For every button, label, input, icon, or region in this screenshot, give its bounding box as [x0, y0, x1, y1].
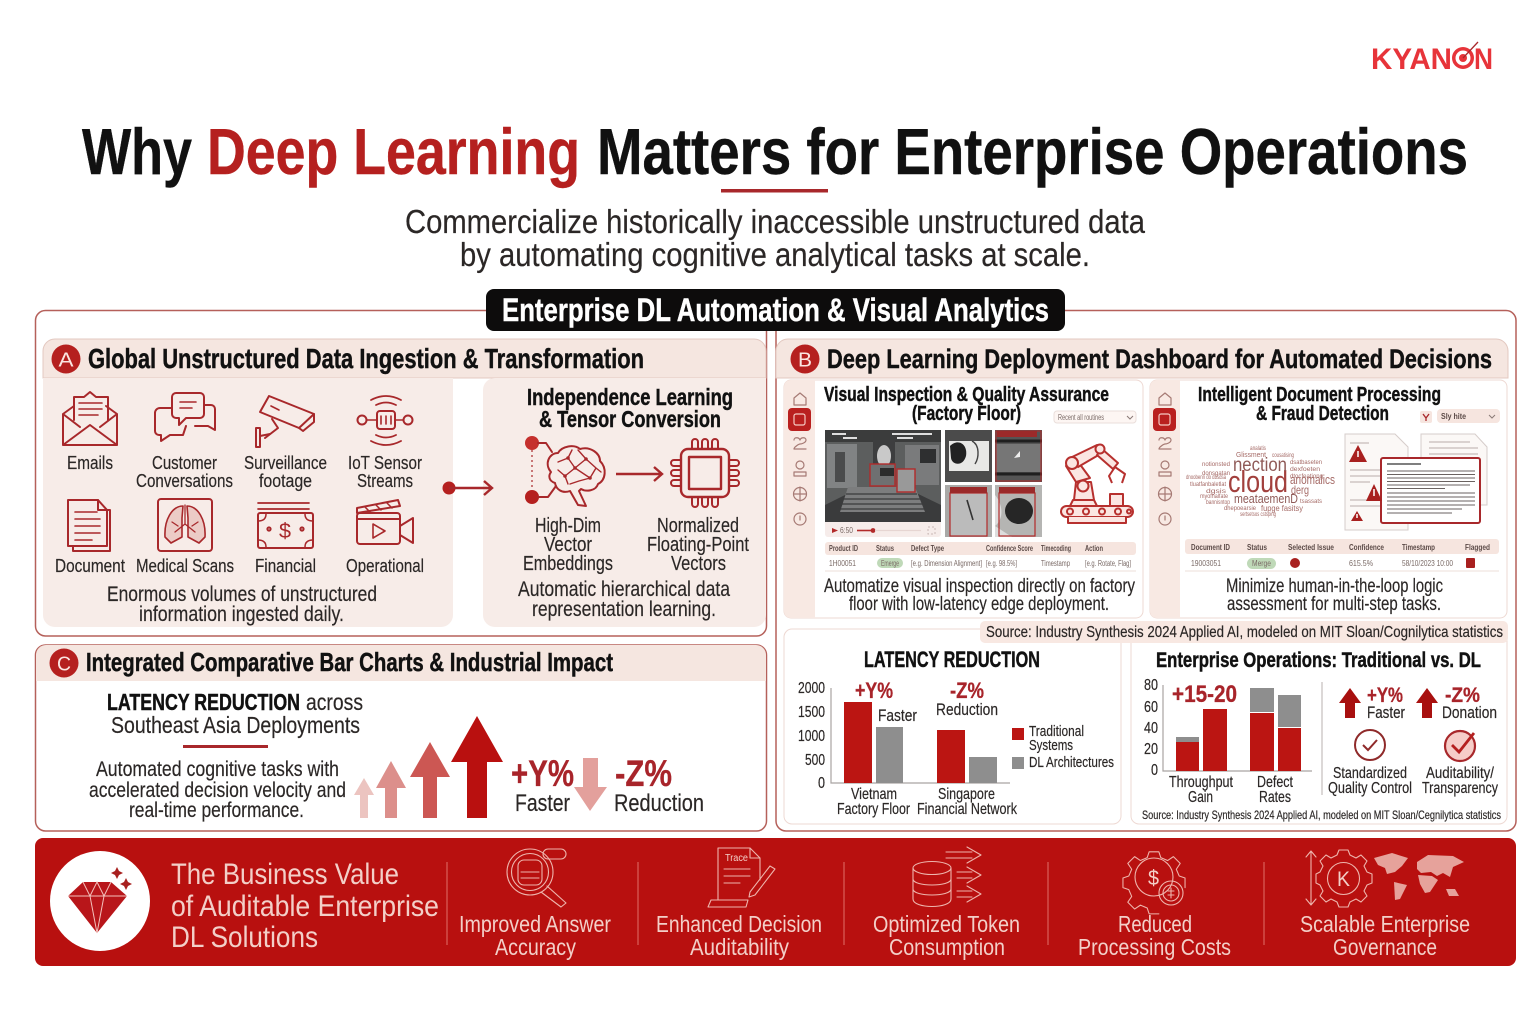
label: IoT sensor streams [348, 453, 422, 491]
icon: ruby in white circle [50, 851, 150, 951]
logo: Kyanon: KYAN [1371, 43, 1452, 76]
table: inspection results: Timecoding [1041, 544, 1071, 553]
label: Accuracy [495, 934, 576, 960]
bar chart: latency: Financial Network [917, 801, 1018, 818]
sub-panel: data sources [43, 378, 453, 627]
label [656, 911, 822, 960]
label [1078, 911, 1231, 960]
icon: auditability check [1445, 731, 1475, 761]
card: visual inspection [784, 380, 1143, 618]
sidebar icons [1153, 393, 1176, 525]
label: document: Document [55, 556, 125, 576]
stat: reduction: -Z% [615, 753, 672, 794]
table: document results: Confidence [1349, 543, 1384, 552]
stat: faster: +Y% [1367, 684, 1403, 707]
icon: world map [1374, 853, 1464, 900]
label: surveillance footage: footage [259, 471, 312, 491]
icon: database with arrows [913, 847, 981, 906]
table: inspection results: Emerge [881, 559, 899, 568]
word cloud: donsgatan [1202, 471, 1230, 477]
label: customer conversations: Customer [152, 453, 217, 473]
word cloud: dhepoearsie [1224, 506, 1257, 512]
panel frame: right section [776, 310, 1516, 831]
filter control [1420, 409, 1500, 423]
heading: document processing [1198, 384, 1441, 425]
heading: independence learning: Independence Learning [527, 384, 733, 410]
label: embeddings: High-Dim [535, 515, 601, 537]
icon: chip [671, 439, 739, 507]
bar chart: latency: Reduction [936, 700, 998, 719]
photo: defect thumbnails [945, 430, 1042, 537]
arrows: rising performance [354, 716, 503, 818]
caption: unstructured volumes: information ingested daily. [139, 603, 344, 626]
icon: operational video [357, 500, 413, 544]
bar chart: latency: 500 [805, 752, 825, 769]
label [1300, 911, 1470, 960]
label: auditability transparency: Transparency [1422, 780, 1498, 797]
icon: magnifier [507, 849, 566, 907]
legend [1012, 723, 1114, 771]
label: standardized quality control: Quality Control [1328, 780, 1412, 797]
word cloud: dnoobenn do dbsdsa [1186, 475, 1226, 481]
label: medical scans: Medical Scans [136, 556, 234, 576]
stat: faster: +Y% [511, 753, 574, 794]
icon: email [63, 392, 117, 445]
badge A [52, 344, 80, 374]
icon: medical scan [158, 499, 212, 551]
card: document processing [1150, 380, 1507, 618]
table: document results: Merge [1252, 559, 1271, 568]
panel frame: left sections [36, 310, 766, 636]
word cloud: Glissment [1236, 452, 1266, 459]
heading: document processing: Intelligent Document Processing [1198, 384, 1441, 406]
table: document results [1185, 539, 1499, 571]
table: inspection results: [e.g. Rotate, Flag] [1085, 559, 1131, 568]
word cloud: fupge fasitsy [1261, 504, 1303, 513]
icon: gear with coins [1123, 852, 1185, 914]
word cloud: sertsetsos cstsping [1240, 512, 1276, 518]
bar chart: throughput and defects: 40 [1144, 720, 1158, 737]
document stack with fraud warnings [1345, 434, 1487, 530]
panel C: comparative impact [36, 645, 766, 831]
table: inspection results: Status [876, 544, 894, 553]
word cloud: dtocfeationg [1290, 474, 1323, 480]
table: inspection results: Timestamp [1041, 559, 1070, 568]
label: IoT sensor streams: IoT Sensor [348, 453, 422, 473]
arrow: ingestion to learning [442, 481, 492, 495]
table: document results: Flagged [1465, 543, 1490, 552]
bar chart: throughput and defects: 20 [1144, 741, 1158, 758]
label: Processing Costs [1078, 934, 1231, 960]
text: automated cognitive tasks: accelerated decision velocity and [89, 779, 346, 802]
label: IoT sensor streams: Streams [357, 471, 413, 491]
badge A: A [58, 350, 74, 372]
table: inspection results: Product ID [829, 544, 858, 553]
bar chart: latency: -Z% [950, 678, 984, 703]
heading: latency across Southeast Asia [107, 689, 363, 748]
legend: DL Architectures [1029, 754, 1114, 771]
label: Enhanced Decision [656, 911, 822, 937]
word cloud: notionsted [1202, 462, 1230, 468]
label: operational: Operational [346, 556, 424, 576]
word cloud: derg [1291, 483, 1309, 497]
word cloud: dsatbaseten [1290, 460, 1322, 466]
title: Why [82, 115, 192, 188]
stat: donation: Donation [1442, 703, 1497, 722]
stat: donation [1416, 684, 1497, 722]
icon: customer chat [155, 393, 215, 441]
subtitle: by automating cognitive analytical tasks at scale. [460, 236, 1090, 273]
bar chart: throughput and defects: Rates [1259, 789, 1291, 806]
label: embeddings: Embeddings [523, 553, 613, 575]
word cloud: tluatfanbaletlat [1190, 482, 1226, 488]
subtitle: Commercialize historically inaccessible unstructured data [405, 203, 1146, 240]
table: document results: Timestamp [1402, 543, 1435, 552]
label: normalized vectors: Normalized [657, 515, 739, 537]
label: surveillance footage [244, 453, 327, 491]
banner heading: Enterprise DL Automation & Visual Analytics [502, 292, 1049, 328]
bar chart: latency: Singapore [938, 786, 995, 803]
table: inspection results: [e.g. 98.5%] [986, 559, 1017, 568]
legend: Systems [1029, 737, 1073, 754]
title [82, 115, 1468, 192]
text: automated cognitive tasks: Automated cognitive tasks with [96, 758, 339, 781]
caption: unstructured volumes [107, 583, 377, 626]
item: enhanced decision auditability [656, 848, 822, 960]
bar chart: latency [798, 678, 1018, 818]
word cloud: dgsis [1206, 489, 1226, 495]
heading: business value [171, 858, 439, 954]
title: Deep Learning [207, 115, 580, 188]
bar chart: throughput and defects: Gain [1188, 789, 1213, 806]
badge C: C [57, 654, 71, 676]
stat: faster: Faster [1367, 703, 1405, 722]
label: standardized quality control [1328, 765, 1412, 797]
table: document results: Selected Issue [1288, 543, 1334, 552]
word cloud: bannisntop [1206, 500, 1231, 506]
stat: faster: Faster [515, 790, 570, 817]
item: optimized token consumption [873, 847, 1020, 960]
label: auditability transparency [1422, 765, 1498, 797]
heading: latency reduction: LATENCY REDUCTION [864, 647, 1040, 672]
word cloud: analatis [1250, 446, 1266, 452]
icon: trace document [708, 848, 775, 907]
icon: IoT sensor [358, 396, 412, 445]
icon: document [68, 500, 110, 551]
table: inspection results: [e.g. Dimension Alignment] [911, 559, 982, 568]
icon: trace document: Trace [725, 853, 748, 864]
heading: visual inspection [824, 384, 1109, 425]
table: document results: Status [1247, 543, 1267, 552]
card: enterprise operations [1131, 629, 1507, 824]
label: Consumption [889, 934, 1005, 960]
caption: visual inspection: floor with low-latency edge deployment. [849, 594, 1109, 615]
label: embeddings [523, 515, 613, 575]
logo: Kyanon: N [1474, 43, 1493, 76]
stat: reduction: Reduction [614, 790, 704, 817]
panel A: data ingestion [35, 339, 1516, 966]
photo: factory conveyor: 6:50 [840, 526, 853, 535]
heading: latency across Southeast Asia: across [306, 689, 363, 715]
text: automated cognitive tasks [89, 758, 346, 822]
arrow: down [574, 758, 607, 811]
label: normalized vectors: Vectors [671, 553, 726, 575]
heading C: Integrated Comparative Bar Charts & Industrial Impact [86, 647, 613, 677]
label: embeddings: Vector [544, 534, 592, 556]
label: surveillance footage: Surveillance [244, 453, 327, 473]
word cloud: anomalics [1290, 472, 1335, 487]
label: Improved Answer [459, 911, 611, 937]
word cloud [1186, 446, 1335, 518]
legend: Traditional [1029, 723, 1084, 740]
table: document results: 58/10/2023 10:00 [1402, 559, 1453, 568]
label [459, 911, 611, 960]
bar chart: throughput and defects: 80 [1144, 677, 1158, 694]
bar chart: latency: Vietnam [851, 786, 897, 803]
arrow: embeddings to vectors [616, 467, 662, 481]
label: normalized vectors: Floating-Point [647, 534, 749, 556]
bar chart: throughput and defects: 60 [1144, 699, 1158, 716]
icon: scale arrow and K gear [1306, 850, 1372, 907]
icon text: dollar sign: $ [279, 520, 291, 543]
label: auditability transparency: Auditability/ [1426, 765, 1495, 782]
label: Reduced [1118, 911, 1192, 937]
heading: latency across Southeast Asia: LATENCY REDUCTION [107, 689, 300, 715]
heading: business value: The Business Value [171, 858, 399, 891]
label: Optimized Token [873, 911, 1020, 937]
table: inspection results: 1H00051 [829, 559, 856, 568]
icon: standardized quality check [1355, 730, 1385, 760]
badge B: B [798, 350, 812, 372]
label: customer conversations: Conversations [136, 471, 233, 491]
stat: faster [1339, 684, 1405, 722]
table: document results: 19003051 [1191, 559, 1221, 568]
bar chart: throughput and defects: +15-20 [1172, 681, 1237, 708]
heading: document processing: & Fraud Detection [1256, 403, 1389, 425]
logo: Kyanon [1371, 42, 1493, 76]
caption: document processing: assessment for multi-step tasks. [1227, 594, 1441, 615]
bar chart: latency: Faster [878, 706, 917, 725]
label: Auditability [690, 934, 789, 960]
table: inspection results [825, 542, 1136, 571]
bar chart: throughput and defects: 0 [1151, 762, 1158, 779]
word cloud: myofhalfate [1200, 494, 1229, 500]
stat: faster [511, 753, 574, 817]
table: inspection results: Action [1085, 544, 1103, 553]
icon: scale arrow and K gear: K [1337, 868, 1350, 891]
heading: business value: of Auditable Enterprise [171, 890, 439, 923]
item: improved answer accuracy [459, 849, 611, 960]
caption: representation learning [518, 578, 730, 621]
icon: neural brain [525, 436, 605, 506]
bar chart: latency: 0 [818, 775, 825, 792]
stat: reduction [614, 753, 704, 817]
word cloud: meataemenD [1234, 491, 1298, 506]
bar chart: latency: 1500 [798, 704, 825, 721]
item: scalable enterprise governance [1300, 850, 1470, 960]
caption: representation learning: Automatic hierarchical data [518, 578, 730, 601]
icon text: dollar: $ [1148, 867, 1159, 890]
heading: visual inspection: Visual Inspection & Quality Assurance [824, 384, 1109, 406]
badge B [790, 344, 820, 374]
badge C [50, 648, 78, 678]
heading: independence learning: & Tensor Conversion [539, 406, 721, 432]
bar chart: throughput and defects [1144, 677, 1312, 806]
caption: visual inspection [824, 576, 1135, 615]
word cloud: nection [1233, 455, 1287, 476]
table: inspection results: Defect Type [911, 544, 944, 553]
label: Governance [1333, 934, 1437, 960]
heading: independence learning [527, 384, 733, 432]
bar chart: throughput and defects: Throughput [1169, 774, 1233, 791]
bar chart: latency: +Y% [855, 678, 893, 703]
sub-panel: tensor conversion [483, 378, 766, 627]
text: automated cognitive tasks: real-time performance. [129, 799, 304, 822]
label [873, 911, 1020, 960]
filter control: Sly hite [1441, 412, 1466, 421]
card: latency chart [784, 629, 1121, 824]
subtitle [405, 203, 1146, 273]
caption: document processing: Minimize human-in-the-loop logic [1226, 576, 1443, 597]
label: Scalable Enterprise [1300, 911, 1470, 937]
word cloud: cloud [1228, 464, 1288, 499]
table: document results: 615.5% [1349, 559, 1373, 568]
table: document results: Document ID [1191, 543, 1230, 552]
label: customer conversations [136, 453, 233, 491]
caption: visual inspection: Automatize visual inspection directly on factory [824, 576, 1135, 597]
icon: surveillance camera [256, 396, 314, 447]
label: normalized vectors [647, 515, 749, 575]
heading A: Global Unstructured Data Ingestion & Transformation [88, 343, 644, 374]
bar chart: throughput and defects: Defect [1257, 774, 1293, 791]
caption: unstructured volumes: Enormous volumes of unstructured [107, 583, 377, 606]
dropdown [1054, 411, 1136, 423]
caption: document processing [1226, 576, 1443, 615]
word cloud: tsassats [1300, 499, 1322, 505]
heading: visual inspection: (Factory Floor) [912, 403, 1021, 425]
label: financial: Financial [255, 556, 316, 576]
label: emails: Emails [67, 453, 113, 473]
item: reduced processing costs [1078, 852, 1231, 960]
icon: financial [258, 503, 313, 548]
bar chart: latency: 2000 [798, 680, 825, 697]
sidebar icons [788, 393, 811, 525]
word cloud: dexfoeten [1290, 467, 1320, 473]
heading: business value: DL Solutions [171, 921, 318, 954]
band: business value [35, 838, 1516, 966]
bar chart: latency: 1000 [798, 728, 825, 745]
heading: latency across Southeast Asia: Southeast Asia Deployments [111, 712, 360, 738]
stat: donation: -Z% [1445, 684, 1480, 707]
panel B: deployment dashboard [776, 339, 1508, 824]
icon: robot arm [1061, 444, 1133, 523]
label: standardized quality control: Standardized [1333, 765, 1407, 782]
photo: factory conveyor [825, 430, 941, 537]
bar chart: latency: Factory Floor [837, 801, 911, 818]
caption: representation learning: representation learning. [532, 598, 716, 621]
dropdown: Recent all routines [1058, 413, 1104, 422]
word cloud: cousatising [1272, 453, 1294, 459]
table: inspection results: Confidence Score [986, 544, 1033, 553]
